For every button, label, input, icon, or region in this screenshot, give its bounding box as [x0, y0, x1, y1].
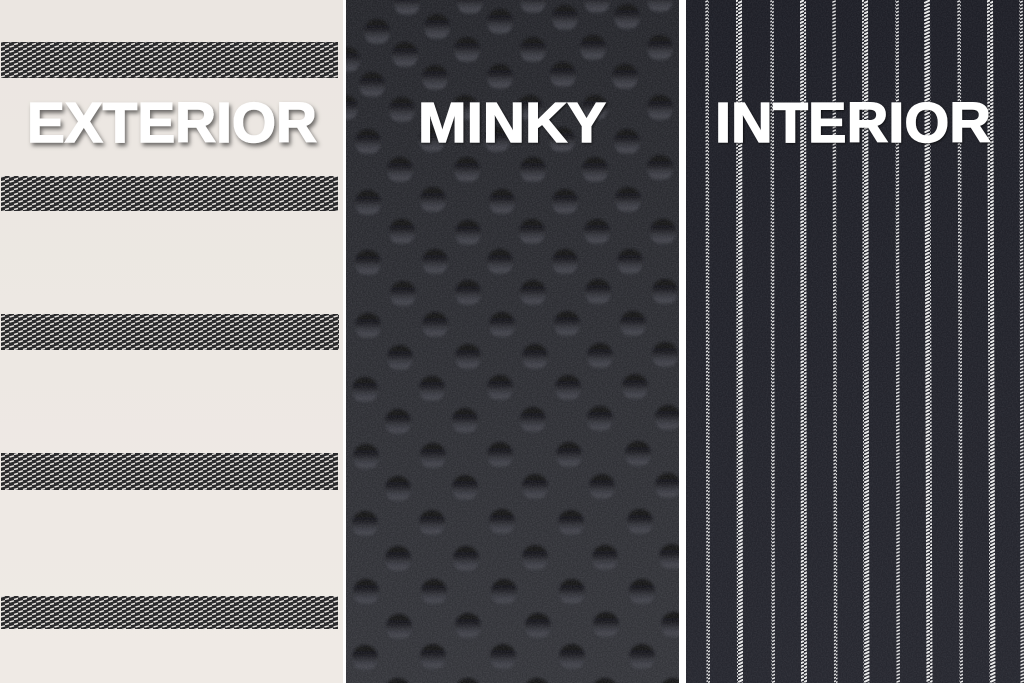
- panel: exterior fabric: [0, 0, 343, 683]
- panel: interior fabric: [686, 0, 1024, 683]
- minky plush texture: [346, 0, 679, 683]
- minky background: [346, 0, 679, 683]
- interior texture: [686, 0, 1024, 683]
- panel: minky fabric: [332, 0, 687, 683]
- interior thick pinstripes: [736, 0, 996, 683]
- heading: exterior: EXTERIOR: [27, 91, 317, 155]
- interior background: [686, 0, 1024, 683]
- exterior woven stripes: [1, 42, 339, 629]
- exterior background: [0, 0, 343, 683]
- minky raised dots: [332, 0, 687, 683]
- heading: interior: INTERIOR: [715, 91, 991, 155]
- heading: minky: MINKY: [418, 91, 606, 155]
- interior thin pinstripes: [705, 0, 1024, 683]
